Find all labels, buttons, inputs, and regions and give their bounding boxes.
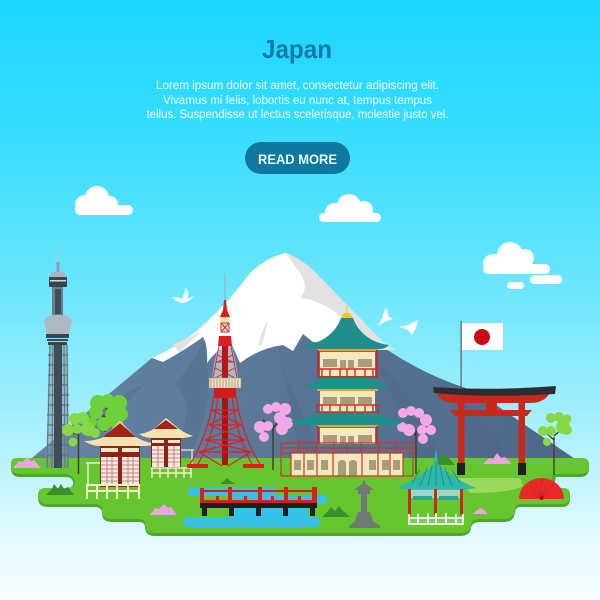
bush: green behind gazebo — [433, 454, 455, 465]
skytree tower — [44, 244, 72, 468]
bush: pink right — [483, 453, 512, 464]
mountain snow shading — [172, 253, 395, 352]
left house — [84, 421, 155, 499]
bush: green lower centre — [322, 506, 350, 517]
red folding fan — [519, 478, 564, 500]
title: Japan — [262, 34, 332, 64]
pink cherry tree right — [397, 406, 436, 474]
island ground — [11, 458, 589, 536]
text block: description — [146, 80, 448, 121]
japanese flag — [460, 321, 503, 389]
path: light green — [457, 478, 523, 493]
bush: pink lower left — [150, 504, 177, 515]
bird centre — [377, 308, 393, 326]
gazebo — [397, 448, 476, 525]
bush: pink left — [13, 457, 41, 468]
cloud: right — [483, 242, 562, 289]
right house — [139, 418, 194, 478]
cloud: centre — [319, 194, 381, 222]
text block: description: Vivamus mi felis, lobortis eu nunc at, tempus tempus — [163, 95, 432, 107]
text block: description: tellus. Suspendisse ut lectus scelerisque, molestie justo vel. — [146, 109, 448, 121]
pink cherry tree left — [254, 402, 293, 470]
button: read more — [245, 142, 350, 174]
bird left — [172, 288, 194, 303]
torii gate — [433, 386, 556, 475]
bush: pink small — [473, 508, 488, 514]
tree: green large — [87, 394, 128, 432]
water — [183, 487, 327, 527]
pagoda — [281, 306, 413, 476]
bush: green small centre — [220, 478, 235, 484]
bush: green left — [46, 484, 74, 495]
stone lantern — [349, 479, 380, 528]
bird right — [399, 320, 418, 335]
tree: green right — [538, 412, 572, 475]
mountain — [27, 253, 581, 463]
tokyo tower — [187, 273, 264, 468]
button: read more: READ MORE — [258, 151, 337, 167]
cloud: upper left — [75, 186, 133, 215]
mountain snow cap — [152, 253, 395, 363]
text block: description: Lorem ipsum dolor sit amet, consectetur adipiscing elit. — [156, 80, 439, 92]
bridge — [200, 487, 317, 516]
tree: green small left — [62, 412, 100, 474]
